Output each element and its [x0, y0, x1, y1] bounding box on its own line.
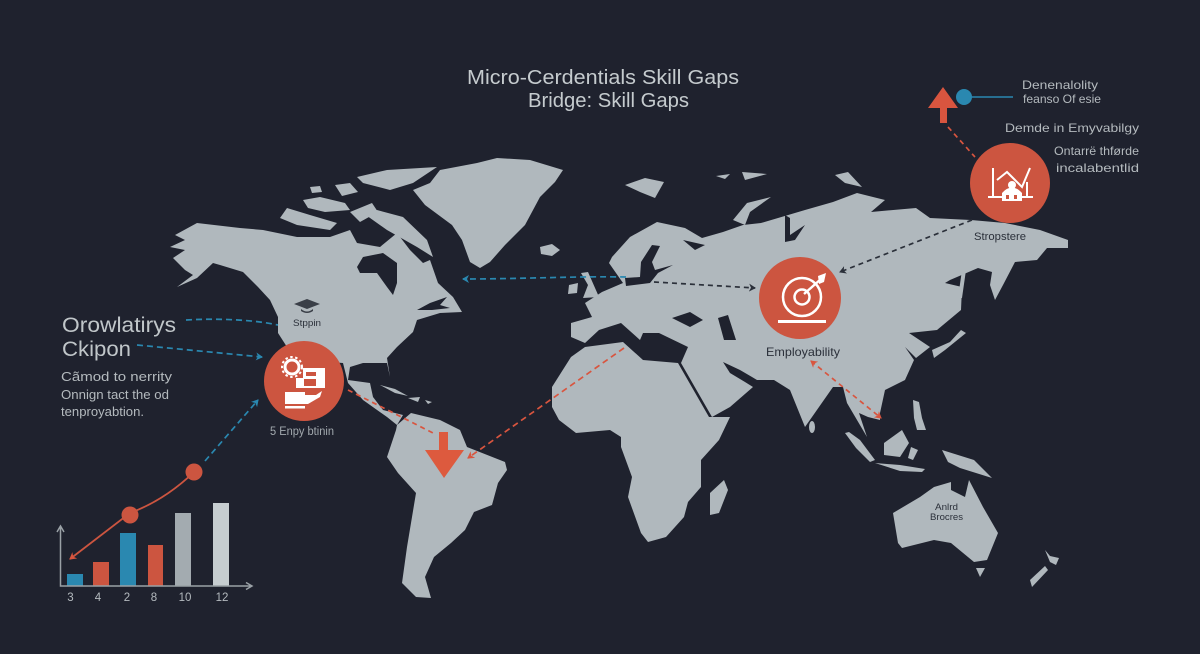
icon circle: target: [759, 257, 841, 339]
chart axis labels: 10: [179, 592, 191, 604]
Baffin Island: [363, 210, 433, 257]
Hudson Bay: [357, 253, 397, 295]
White Sea and Gulf of Ob: [683, 215, 805, 250]
left heading: [62, 314, 176, 361]
Philippines: [913, 400, 926, 430]
chart axis labels: 8: [151, 592, 157, 604]
New Zealand: [1030, 550, 1059, 587]
connector: blue dashed across Atlantic: [463, 277, 626, 279]
top right text block: Denenalolity: [1022, 78, 1098, 92]
Great Britain and Ireland: [568, 272, 599, 298]
Iceland: [540, 244, 560, 256]
label: Enpy btinin: 5 Enpy btinin: [270, 426, 334, 438]
left heading: Orowlatirys: [62, 314, 176, 337]
Borneo: [884, 430, 909, 457]
Caribbean islands: [380, 385, 432, 404]
connector: heading to left circle: [137, 345, 262, 357]
label: Employability: Employability: [766, 345, 840, 359]
world map: [170, 158, 1068, 598]
connector: Central America to down arrow: [348, 390, 433, 433]
icon: graduation cap with label: Stppin: [293, 318, 321, 329]
chart axes: [57, 526, 252, 590]
trend line with nodes: [70, 464, 202, 559]
title: Micro-Cerdentials Skill Gaps: [467, 67, 739, 89]
Gulf of St Lawrence: [417, 297, 450, 310]
icon: blue dot with line: [956, 89, 1013, 105]
Svalbard and Novaya Zemlya: [625, 172, 862, 225]
Baltic and Black Sea: [625, 245, 736, 340]
Africa: [552, 342, 730, 542]
connector: employability to Southeast Asia: [811, 361, 881, 418]
label: Australia region: [930, 502, 963, 523]
connector: Siberia to target: [840, 220, 972, 272]
connector: Mediterranean to South America: [468, 348, 624, 458]
icon circle: skills and hand: [264, 341, 344, 421]
Greenland: [413, 158, 563, 268]
chart axis labels: 4: [95, 592, 102, 604]
Sumatra and Java: [845, 432, 925, 472]
chart axis labels: [67, 592, 228, 604]
connector: heading to North America: [186, 319, 278, 325]
chart axis labels: 12: [216, 592, 228, 604]
connector: chart to left circle: [205, 400, 258, 461]
top right text block: incalabentlid: [1056, 161, 1139, 175]
Arctic islands: [303, 183, 378, 222]
title: [467, 67, 739, 112]
bar chart: [57, 464, 252, 604]
top right text block: Demde in Emyvabilgy: [1005, 121, 1139, 135]
icon circle: growth chart: [970, 143, 1050, 223]
chart axis labels: 3: [67, 592, 74, 604]
Japan and Sakhalin: [932, 270, 966, 358]
left text block: Cãmod to nerrity: [61, 370, 173, 384]
North America: [170, 223, 462, 425]
New Guinea: [942, 450, 992, 478]
Banks Island group: [280, 208, 337, 230]
label: Australia region: Brocres: [930, 512, 963, 523]
Australia: [893, 480, 998, 562]
Sri Lanka: [809, 421, 815, 433]
left text block: Onnign tact the od: [61, 388, 169, 402]
icon: red up arrow: [928, 87, 958, 123]
connector: Europe to target: [654, 282, 755, 288]
left heading: Ckipon: [62, 338, 131, 361]
Sulawesi: [908, 447, 918, 460]
top right text block: [1005, 78, 1139, 175]
label: Stropstere: Stropstere: [974, 231, 1026, 243]
Ellesmere Island: [357, 167, 437, 190]
left text block: tenproyabtion.: [61, 405, 144, 419]
top right text block: Ontarrë thførde: [1054, 144, 1139, 158]
top right text block: feanso Of esie: [1023, 92, 1101, 106]
title: Bridge: Skill Gaps: [528, 90, 689, 112]
icon: graduation cap with label: [293, 299, 321, 329]
chart axis labels: 2: [124, 592, 130, 604]
South America: [387, 413, 507, 598]
label: Australia region: Anlrd: [935, 502, 958, 513]
Eurasia: [571, 193, 1068, 437]
left text block: [61, 370, 173, 419]
Madagascar: [710, 480, 728, 515]
connector: top arrow to right circle: [948, 127, 975, 157]
icon: red down arrow: [425, 432, 464, 478]
Tasmania: [976, 568, 985, 577]
chart bars: [67, 503, 229, 586]
